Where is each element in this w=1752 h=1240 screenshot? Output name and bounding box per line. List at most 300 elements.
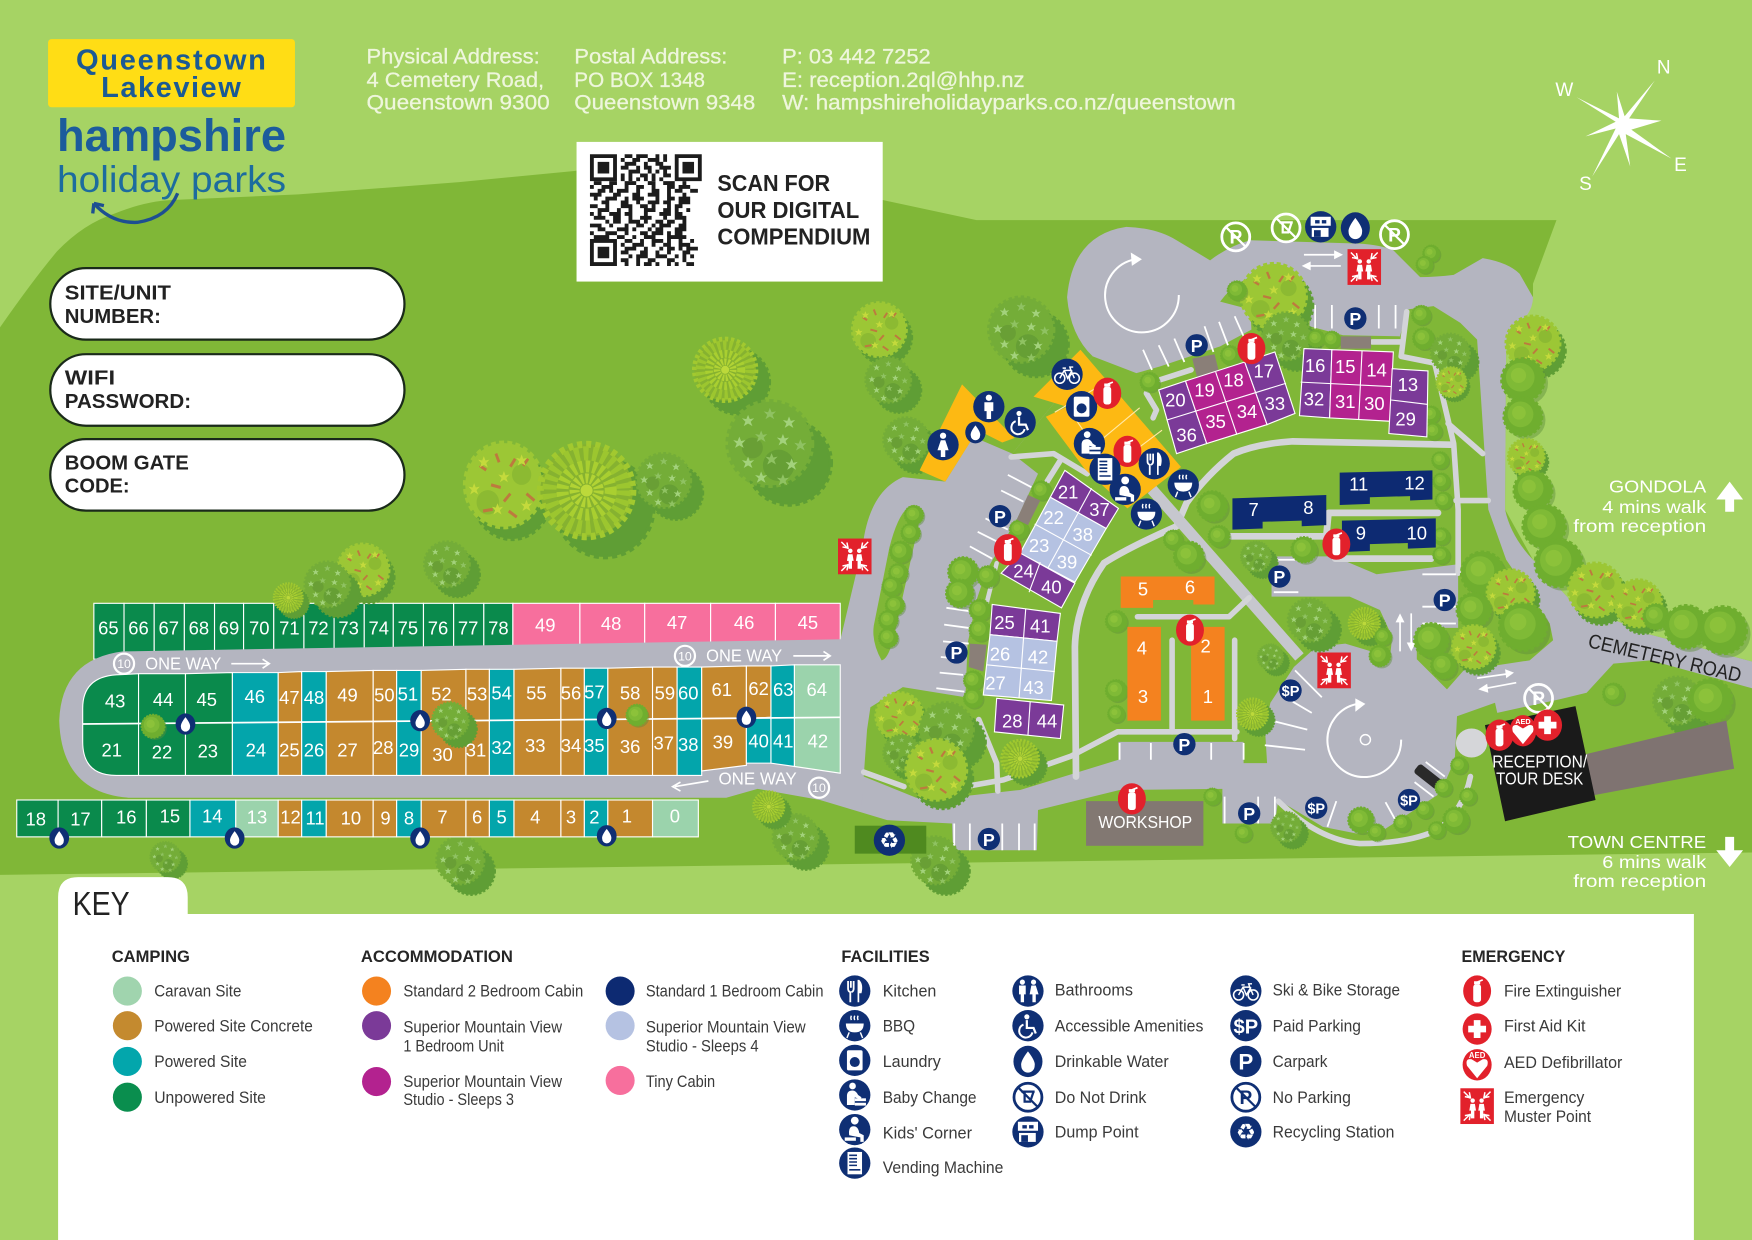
cabins: block 25-28 and 41-44: 25 — [994, 612, 1015, 633]
cabins: navy units 11-12: 11 — [1349, 474, 1368, 495]
legend: facilities: Vending Machine — [883, 1158, 1003, 1177]
legend: camping: Caravan Site — [154, 982, 241, 1001]
legend: facilities: Drinkable Water — [1055, 1052, 1169, 1071]
site numbers: middle lower row: 33 — [525, 735, 545, 756]
icon: reception fire extinguisher — [1486, 720, 1513, 751]
one way sign: top right: 10 — [678, 649, 692, 663]
icon: no parking at entrance: P — [1532, 689, 1545, 710]
arrow: down to town centre — [1716, 837, 1743, 867]
icon: no parking at entrance — [1525, 684, 1553, 712]
site numbers: bottom row: 7 — [437, 806, 448, 827]
site numbers: bottom row: 12 — [280, 806, 301, 827]
legend: facilities: Recycling Station — [1273, 1122, 1394, 1141]
legend: emergency: Muster Point — [1504, 1107, 1591, 1126]
arrow: two-way upper road — [1302, 250, 1343, 270]
physical address: Physical Address: — [366, 46, 540, 69]
site numbers: middle lower row: 21 — [101, 739, 122, 760]
cabins: block 14-16 and 30-32 — [1299, 349, 1393, 421]
cabins: block 14-16 and 30-32: 14 — [1366, 360, 1387, 381]
cabins: navy units 9-10: 10 — [1407, 523, 1427, 544]
site numbers: middle upper row: 62 — [748, 678, 769, 699]
carpark and plaza line markings — [936, 305, 1456, 850]
site numbers: middle upper row — [105, 678, 827, 711]
site numbers: top row: 66 — [128, 618, 149, 639]
legend: accommodation: Studio - Sleeps 4 — [646, 1036, 759, 1055]
site numbers: middle lower row: 36 — [620, 736, 640, 757]
brand logo — [57, 110, 286, 222]
site numbers: middle upper row: 51 — [398, 684, 418, 705]
icon: muster point plaza — [1317, 653, 1351, 688]
legend: camping: Unpowered Site — [154, 1088, 266, 1107]
parked car — [1413, 763, 1444, 791]
one way sign: top right — [675, 645, 830, 666]
legend: accommodation: 1 Bedroom Unit — [403, 1036, 504, 1055]
cabins: navy units 9-10: 9 — [1356, 523, 1366, 544]
icon: water — [965, 421, 986, 443]
site numbers: bottom row: 13 — [247, 806, 267, 827]
icon: fire extinguisher — [1113, 436, 1141, 467]
cabins: orange units 1-2: 2 — [1200, 636, 1211, 657]
panel: key — [58, 877, 1694, 1240]
compass: N — [1657, 58, 1671, 79]
legend: facilities: $P — [1234, 1017, 1258, 1039]
cabins: block 14-16 and 30-32: 32 — [1304, 389, 1324, 410]
site numbers: top row: 46 — [734, 612, 754, 633]
site numbers: bottom row: 15 — [160, 805, 180, 826]
contact details — [782, 46, 1236, 114]
site numbers: top row: 68 — [189, 618, 209, 639]
site numbers: top row: 69 — [219, 618, 239, 639]
site numbers: middle lower row: 41 — [773, 730, 794, 751]
site numbers: top row: 65 — [98, 618, 119, 639]
legend: emergency: First Aid Kit — [1504, 1016, 1586, 1035]
reception forecourt — [1456, 728, 1487, 758]
cabins: orange units 5-6: 6 — [1185, 576, 1195, 597]
compass: S — [1579, 174, 1592, 195]
legend: facilities: Laundry — [883, 1052, 941, 1071]
legend: accommodation: Standard 1 Bedroom Cabin — [646, 982, 823, 1001]
icon: kitchen — [1139, 448, 1170, 479]
green strip island — [873, 505, 920, 660]
legend: accommodation: Superior Mountain View — [403, 1072, 563, 1091]
site numbers: top row: 45 — [798, 612, 818, 633]
postal address: Postal Address: — [574, 46, 727, 69]
campground middle island sites — [83, 665, 840, 775]
roads: main park road network — [782, 227, 1752, 850]
legend: facilities: Do Not Drink — [1055, 1088, 1147, 1107]
site numbers: middle lower row: 26 — [304, 739, 324, 760]
site numbers: middle lower row: 32 — [491, 737, 512, 758]
icon: no parking: P — [1229, 228, 1242, 249]
site numbers: middle upper row: 47 — [279, 687, 300, 708]
site numbers: middle lower row: 34 — [561, 735, 581, 756]
icon: bike storage — [1051, 359, 1083, 390]
legend: facilities: Kids' Corner — [883, 1124, 972, 1143]
site numbers: middle lower row: 28 — [373, 737, 394, 758]
physical address: 4 Cemetery Road, — [366, 69, 544, 92]
cabins: navy units 9-10 — [1342, 518, 1436, 552]
cabins: navy units 7-8: 7 — [1249, 499, 1259, 520]
icon: do not drink — [1272, 214, 1300, 242]
boom gate code pill: BOOM GATE — [65, 452, 189, 474]
boom gate code pill: CODE: — [65, 476, 130, 498]
site numbers: bottom row: 14 — [202, 805, 223, 826]
cabins: block 14-16 and 30-32: 15 — [1335, 356, 1356, 377]
cabins: block 25-28 and 41-44: 43 — [1023, 677, 1044, 698]
site numbers: middle upper row: 61 — [712, 679, 732, 700]
icon: no parking — [1222, 223, 1250, 251]
icon: muster point north — [1348, 249, 1381, 285]
reception and tour desk building: RECEPTION/ — [1492, 752, 1587, 772]
cabins: navy units 11-12: 12 — [1404, 472, 1425, 493]
compass: W — [1555, 80, 1573, 101]
site numbers: middle upper row: 46 — [245, 686, 265, 707]
legend: camping — [112, 947, 313, 1112]
site numbers: middle upper row: 44 — [153, 689, 173, 710]
cabins: block 14-16 and 30-32: 31 — [1335, 391, 1356, 412]
icon: car parking markers: P — [983, 830, 995, 850]
site numbers: bottom row: 10 — [341, 808, 361, 829]
site numbers: middle lower row: 27 — [337, 739, 358, 760]
QR panel — [577, 142, 883, 282]
icon: car parking markers: P — [1191, 336, 1203, 356]
site numbers: middle upper row: 56 — [561, 682, 581, 703]
icon: bbq — [1131, 498, 1162, 530]
icon: fire extinguisher — [1237, 333, 1265, 364]
site numbers: top row — [98, 612, 818, 639]
cabins: block 13 and 29 — [1389, 369, 1428, 437]
icon: camp water taps — [49, 707, 756, 849]
contact details: W: hampshireholidayparks.co.nz/queenstown — [782, 91, 1236, 114]
legend: facilities: Dump Point — [1055, 1122, 1139, 1141]
cabins: block 25-28 and 41-44: 42 — [1028, 647, 1048, 668]
icon: car parking markers: P — [1349, 309, 1361, 329]
site numbers: top row: 73 — [338, 618, 359, 639]
site numbers: top row: 71 — [279, 618, 300, 639]
legend: facilities: Ski & Bike Storage — [1273, 981, 1400, 1000]
cabins: navy units 7-8 — [1232, 495, 1326, 530]
site numbers: bottom row: 8 — [404, 808, 414, 829]
legend: accommodation — [361, 947, 823, 1109]
campground top row: unpowered sites and tiny cabins — [94, 603, 840, 659]
site numbers: middle upper row: 58 — [620, 682, 640, 703]
cabins: orange units 5-6 — [1121, 576, 1215, 608]
green centre island — [864, 270, 1553, 798]
postal address — [574, 46, 755, 114]
icon: muster point west — [838, 539, 872, 574]
site numbers: top row: 47 — [667, 612, 687, 633]
icon: bbq — [1168, 469, 1199, 501]
legend: accommodation: Studio - Sleeps 3 — [403, 1090, 514, 1109]
site numbers: middle lower row: 40 — [748, 730, 769, 751]
site numbers: bottom row: 0 — [670, 805, 680, 826]
site number pill — [50, 268, 404, 340]
site numbers: bottom row: 17 — [70, 809, 91, 830]
roads: camp loop road — [59, 639, 883, 810]
cabins: block 13 and 29: 29 — [1395, 409, 1416, 430]
direction: gondola: from reception — [1573, 516, 1706, 536]
site numbers: bottom row: 4 — [530, 806, 540, 827]
cabins: block 21-24 and 37-40: 37 — [1089, 499, 1110, 520]
legend: facilities: Carpark — [1273, 1052, 1328, 1071]
brand logo: hampshire — [57, 110, 286, 161]
one way sign: lower: 10 — [812, 781, 826, 795]
legend: emergency: EMERGENCY — [1461, 947, 1565, 966]
site numbers: bottom row: 3 — [566, 806, 576, 827]
legend: facilities — [839, 947, 1400, 1179]
cabins: block 21-24 and 37-40: 38 — [1072, 524, 1093, 545]
park name badge — [48, 39, 295, 107]
cabins: block 25-28 and 41-44: 26 — [990, 643, 1010, 664]
legend: camping: Powered Site Concrete — [154, 1016, 313, 1035]
contact details: E: reception.2ql@hhp.nz — [782, 69, 1025, 92]
icon: fire extinguisher — [994, 534, 1022, 565]
wifi password pill — [50, 354, 404, 426]
cabins: block 25-28 and 41-44: 41 — [1030, 615, 1051, 636]
site numbers: bottom row: 16 — [116, 806, 137, 827]
site number pill: NUMBER: — [65, 306, 161, 328]
site numbers: middle lower row — [101, 730, 828, 765]
trees — [150, 245, 1750, 895]
site numbers: middle upper row: 53 — [467, 684, 487, 705]
icon: car parking markers: P — [950, 643, 962, 663]
icon: reception first aid — [1533, 709, 1562, 741]
site numbers: bottom row: 1 — [622, 805, 632, 826]
boom gate code pill — [50, 439, 404, 511]
one way sign: top left: 10 — [117, 657, 131, 671]
direction: town centre: from reception — [1573, 871, 1706, 891]
cabins: orange units 1-2: 1 — [1203, 686, 1213, 707]
cabins: block 21-24 and 37-40: 23 — [1029, 535, 1049, 556]
cabins: orange units 1-2 — [1191, 627, 1225, 721]
contact details: P: 03 442 7252 — [782, 46, 931, 69]
wifi password pill: PASSWORD: — [65, 391, 191, 413]
cabins: block 17-20 and 33-36 — [1159, 352, 1295, 454]
legend: emergency: AED Defibrillator — [1504, 1053, 1623, 1072]
icon: fire extinguisher — [1176, 615, 1204, 646]
legend: facilities: Paid Parking — [1273, 1016, 1361, 1035]
legend: accommodation: Standard 2 Bedroom Cabin — [403, 982, 583, 1001]
site numbers: middle lower row: 22 — [152, 742, 172, 763]
postal address: PO BOX 1348 — [574, 69, 705, 92]
site numbers: middle upper row: 43 — [105, 690, 125, 711]
workshop building: WORKSHOP — [1098, 812, 1192, 832]
direction: gondola: GONDOLA — [1609, 477, 1706, 497]
arrow: two-way entrance — [1477, 669, 1516, 693]
site numbers: middle lower row: 25 — [279, 739, 300, 760]
legend: facilities: Bathrooms — [1055, 981, 1133, 1000]
legend: camping: CAMPING — [112, 947, 190, 966]
site numbers: middle upper row: 48 — [304, 687, 324, 708]
wifi password pill: WIFI — [65, 367, 115, 389]
icon: no parking: P — [1388, 225, 1401, 246]
legend: facilities: P — [1238, 1049, 1253, 1074]
icon: no parking — [1380, 221, 1408, 249]
legend: facilities: P — [1240, 1088, 1253, 1109]
QR code — [590, 156, 700, 264]
cabins: block 25-28 and 41-44 — [983, 604, 1064, 739]
icon: car parking markers — [945, 307, 1456, 850]
legend: facilities: FACILITIES — [841, 947, 930, 966]
site numbers: middle lower row: 38 — [678, 734, 699, 755]
cabins: block 17-20 and 33-36: 17 — [1253, 361, 1274, 382]
icon: reception AED — [1510, 715, 1536, 746]
icon: dump point — [1305, 211, 1336, 242]
site numbers: middle upper row: 64 — [807, 679, 827, 700]
cabins: block 14-16 and 30-32: 16 — [1305, 355, 1325, 376]
site numbers: middle upper row: 60 — [678, 682, 699, 703]
icon: paid parking markers: $P — [1282, 684, 1300, 700]
legend: facilities: BBQ — [883, 1016, 915, 1035]
arrow: lower turning circle — [1327, 698, 1401, 777]
icon: car parking markers: P — [1178, 735, 1190, 755]
icon: car parking markers: P — [994, 507, 1006, 527]
site numbers: middle lower row: 39 — [713, 732, 733, 753]
workshop building — [1086, 801, 1203, 846]
icon: men's bathroom — [973, 391, 1004, 422]
site numbers: middle upper row: 45 — [196, 689, 217, 710]
site numbers: middle lower row: 29 — [399, 739, 419, 760]
one way sign: top left — [114, 653, 269, 674]
footpaths — [864, 312, 1488, 844]
site numbers: middle upper row: 59 — [655, 682, 675, 703]
cabins: orange units 3-4: 4 — [1137, 638, 1147, 659]
building behind reception — [1577, 721, 1734, 796]
site numbers: bottom row: 5 — [497, 806, 507, 827]
cabins: block 21-24 and 37-40: 21 — [1058, 481, 1078, 502]
site numbers: middle lower row: 37 — [653, 733, 674, 754]
physical address — [366, 46, 550, 114]
icon: drinkable water — [1341, 212, 1370, 244]
cabins: block 21-24 and 37-40: 40 — [1041, 576, 1062, 597]
cabins: block 17-20 and 33-36: 35 — [1205, 411, 1226, 432]
legend: accommodation: Superior Mountain View — [646, 1017, 806, 1036]
site numbers: top row: 49 — [535, 614, 556, 635]
icon: paid parking markers — [1279, 679, 1420, 819]
one way sign: top right: ONE WAY — [706, 645, 782, 665]
site numbers: top row: 72 — [308, 618, 329, 639]
icon: car parking markers: P — [1273, 567, 1285, 587]
legend: accommodation: Tiny Cabin — [646, 1072, 715, 1091]
site numbers: bottom row: 6 — [472, 806, 482, 827]
QR panel: OUR DIGITAL — [717, 197, 859, 223]
legend: facilities: Baby Change — [883, 1088, 977, 1107]
site numbers: middle lower row: 42 — [808, 730, 828, 751]
site numbers: top row: 48 — [601, 613, 621, 634]
cabins: block 21-24 and 37-40: 39 — [1057, 552, 1077, 573]
park name badge: Lakeview — [101, 72, 241, 104]
site numbers: bottom row: 2 — [589, 806, 600, 827]
site numbers: top row: 70 — [249, 618, 269, 639]
facility buildings: kitchen and laundry block — [1034, 350, 1181, 508]
arrow: upper turning circle — [1105, 253, 1179, 332]
one way sign: lower: ONE WAY — [718, 768, 797, 788]
cabins: block 21-24 and 37-40: 24 — [1013, 561, 1034, 582]
compass — [1555, 58, 1687, 195]
direction: gondola: 4 mins walk — [1602, 497, 1706, 517]
direction: town centre: 6 mins walk — [1602, 852, 1706, 872]
cabins: block 21-24 and 37-40: 22 — [1043, 507, 1064, 528]
icon: vending machine — [1089, 454, 1121, 485]
site numbers: top row: 75 — [398, 618, 418, 639]
icon: accessible amenities — [1004, 407, 1036, 438]
site numbers: middle lower row: 30 — [432, 744, 453, 765]
cabins: orange units 5-6: 5 — [1138, 579, 1148, 600]
site numbers: top row: 78 — [488, 618, 509, 639]
brand logo: holiday parks — [57, 159, 286, 200]
legend: camping: Powered Site — [154, 1052, 247, 1071]
legend: emergency: AED — [1469, 1051, 1486, 1060]
site numbers: middle upper row: 55 — [526, 682, 547, 703]
site numbers: bottom row — [26, 805, 680, 830]
cabins: block 17-20 and 33-36: 18 — [1223, 370, 1244, 391]
site numbers: middle upper row: 49 — [337, 685, 358, 706]
arrow: up to gondola — [1716, 482, 1743, 512]
site numbers: middle upper row: 63 — [773, 679, 794, 700]
icon: paid parking markers: $P — [1400, 794, 1418, 810]
legend: facilities: Accessible Amenities — [1055, 1016, 1203, 1035]
legend: accommodation: Superior Mountain View — [403, 1017, 563, 1036]
icon: recycling station — [874, 825, 905, 856]
roundabout centre — [1360, 735, 1370, 745]
icon: baby change — [1074, 428, 1105, 459]
cabins: block 25-28 and 41-44: 28 — [1002, 710, 1023, 731]
trees overlapping the campground — [141, 544, 649, 747]
cabins: block 21-24 and 37-40 — [1001, 470, 1118, 608]
cabins: block 25-28 and 41-44: 44 — [1037, 710, 1057, 731]
icon: car parking markers: P — [1243, 804, 1255, 824]
building connectors — [969, 336, 1371, 672]
site numbers: middle lower row: 24 — [246, 739, 266, 760]
QR panel: SCAN FOR — [717, 170, 830, 196]
legend: accommodation: ACCOMMODATION — [361, 947, 513, 966]
heading: key: KEY — [73, 886, 130, 923]
site numbers: middle lower row: 23 — [198, 741, 218, 762]
site numbers: middle upper row: 57 — [584, 681, 605, 702]
icon: fire extinguisher — [1093, 378, 1121, 409]
icon: car parking markers: P — [1439, 591, 1451, 611]
facility buildings: amenities block — [920, 384, 1015, 482]
site numbers: top row: 67 — [158, 618, 179, 639]
cabins: block 17-20 and 33-36: 33 — [1265, 393, 1285, 414]
site numbers: middle lower row: 35 — [584, 735, 605, 756]
cabins: block 17-20 and 33-36: 19 — [1194, 380, 1215, 401]
site numbers: bottom row: 18 — [26, 809, 46, 830]
park name badge: Queenstown — [76, 44, 266, 76]
site numbers: middle upper row: 50 — [374, 685, 395, 706]
site numbers: top row: 74 — [369, 618, 389, 639]
icon: laundry — [1066, 391, 1097, 422]
cabins: block 17-20 and 33-36: 34 — [1237, 401, 1257, 422]
cabins: orange units 3-4 — [1127, 627, 1161, 721]
direction: town centre — [1568, 832, 1743, 891]
site numbers: top row: 77 — [458, 618, 478, 639]
campground bottom row sites — [17, 800, 698, 837]
legend: facilities: Kitchen — [883, 982, 936, 1001]
cabins: block 17-20 and 33-36: 36 — [1176, 424, 1197, 445]
cabins: orange units 3-4: 3 — [1138, 686, 1148, 707]
icon: kids corner — [1110, 474, 1141, 505]
icon: paid parking markers: $P — [1307, 801, 1325, 817]
icon: fire extinguisher — [1322, 528, 1350, 560]
reception and tour desk building — [1485, 706, 1596, 821]
legend: facilities: No Parking — [1273, 1088, 1351, 1107]
icon: women's bathroom — [927, 429, 959, 460]
direction: town centre: TOWN CENTRE — [1568, 832, 1706, 852]
compass: E — [1674, 155, 1687, 176]
one way sign: top left: ONE WAY — [145, 653, 221, 673]
site numbers: top row: 76 — [428, 618, 448, 639]
